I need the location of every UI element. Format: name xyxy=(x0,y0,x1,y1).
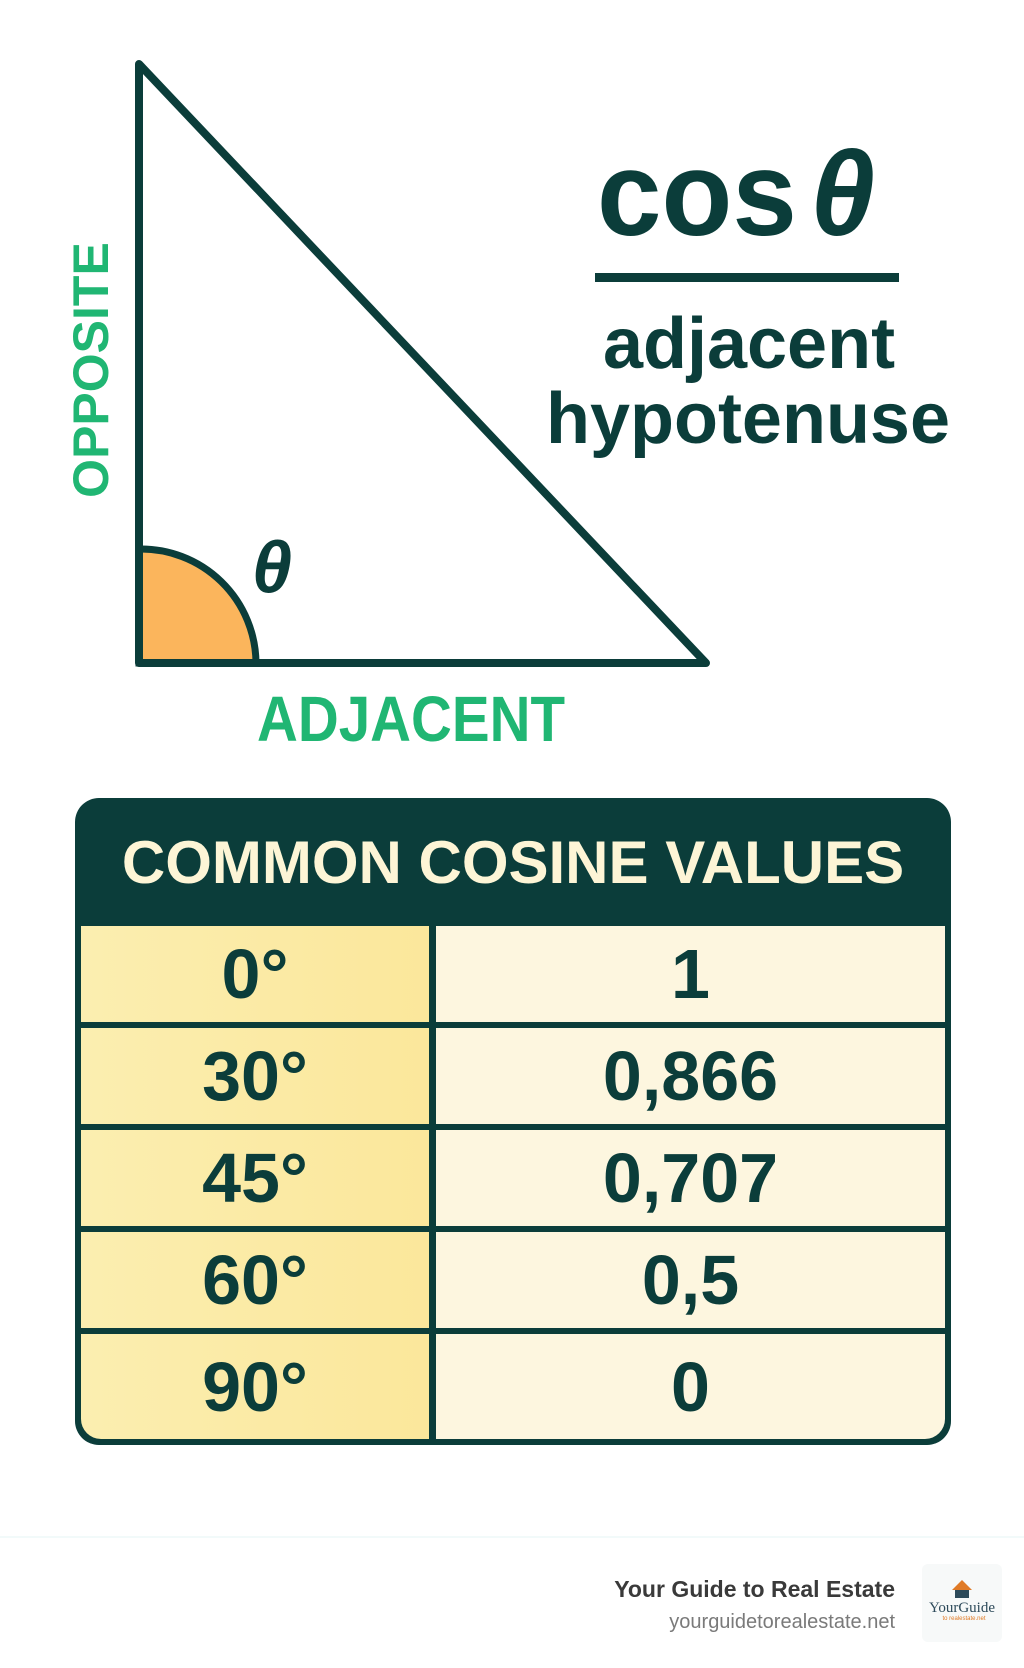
triangle diagram xyxy=(63,60,950,755)
logo: to realestate.net xyxy=(942,1616,986,1622)
triangle xyxy=(139,64,706,663)
rows: 90° xyxy=(202,1348,308,1426)
opposite label: OPPOSITE xyxy=(63,242,119,498)
rows: 0,707 xyxy=(603,1139,778,1217)
rows: 1 xyxy=(671,935,710,1013)
formula: cosθ xyxy=(597,127,875,261)
formula: hypotenuse xyxy=(546,379,950,459)
rows: 60° xyxy=(202,1241,308,1319)
theta label: θ xyxy=(252,528,292,608)
rows: 0 xyxy=(671,1348,710,1426)
formula xyxy=(546,127,950,459)
footer xyxy=(0,1536,1024,1668)
table header: COMMON COSINE VALUES xyxy=(122,828,904,896)
rows: 0,5 xyxy=(642,1241,739,1319)
adjacent label: ADJACENT xyxy=(257,683,565,755)
footer brand text xyxy=(614,1576,895,1633)
angle arc xyxy=(139,549,256,663)
rows: 0,866 xyxy=(603,1037,778,1115)
formula: adjacent xyxy=(603,304,895,384)
rows: 30° xyxy=(202,1037,308,1115)
footer brand text: yourguidetorealestate.net xyxy=(669,1611,895,1633)
rows: 45° xyxy=(202,1139,308,1217)
table: common cosine values xyxy=(75,798,951,1445)
logo xyxy=(922,1564,1002,1642)
footer brand text: Your Guide to Real Estate xyxy=(614,1576,895,1602)
logo: YourGuide xyxy=(929,1600,995,1616)
rows: 0° xyxy=(222,935,288,1013)
rows xyxy=(81,926,945,1439)
